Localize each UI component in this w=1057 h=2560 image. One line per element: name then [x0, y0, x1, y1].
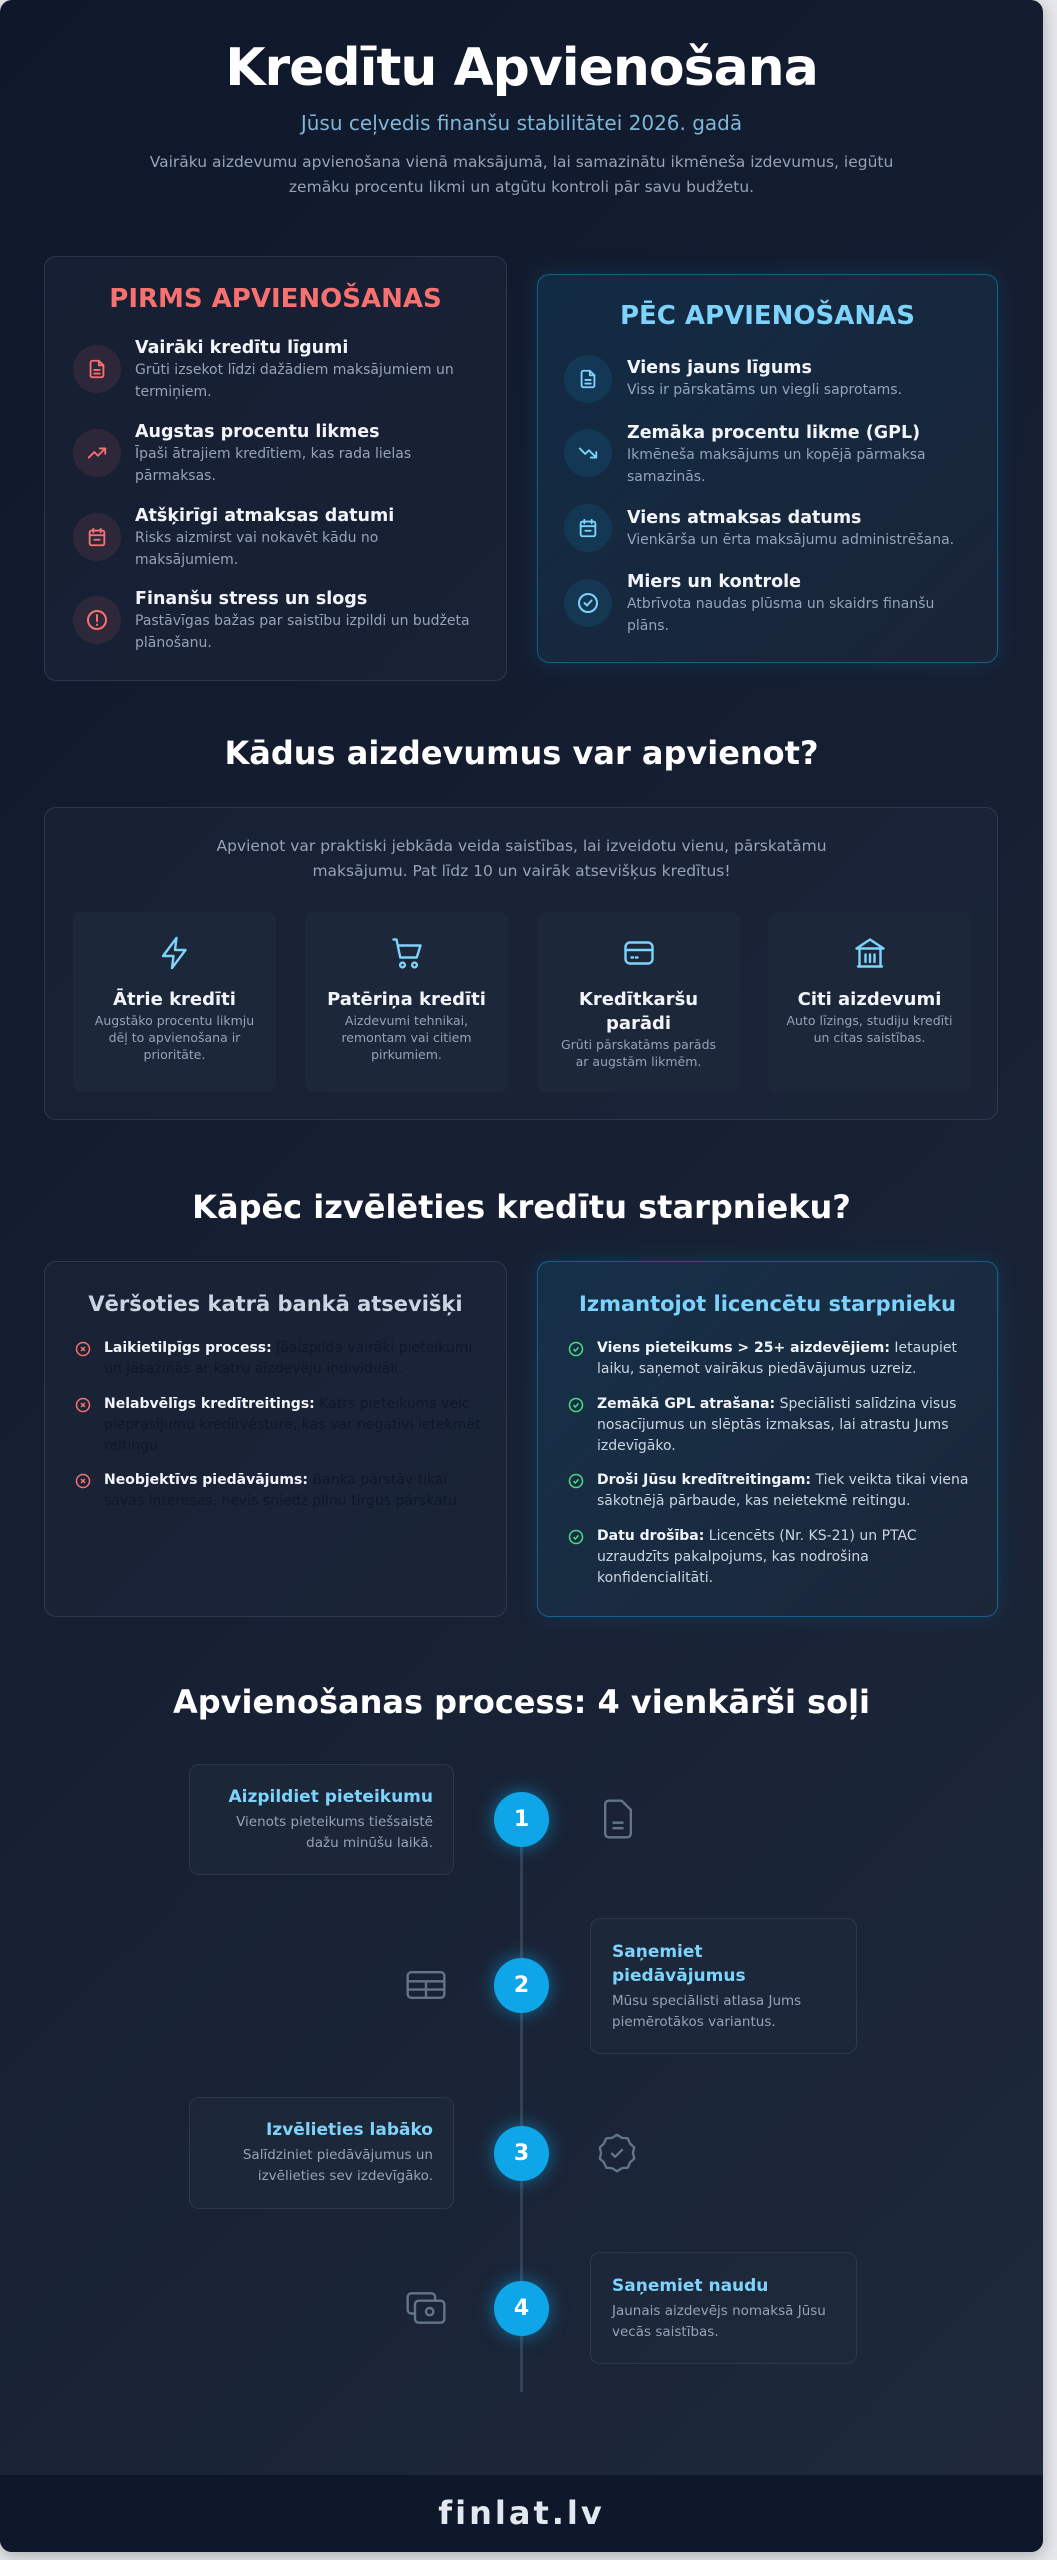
- item: peace: Atbrīvota naudas plūsma un skaidrs finanšu plāns.: [627, 596, 934, 634]
- item: biased offer: Neobjektīvs piedāvājums: Banka pārstāv tikai savas intereses, nevis sniedz pilnu tirgus pārskatu.: [104, 1472, 461, 1509]
- footer: finlat.lv: [438, 2494, 605, 2532]
- icon: trend up: [73, 429, 121, 477]
- step 1 card: dažu minūšu laikā.: [306, 1835, 433, 1851]
- icon: money step4: [406, 2292, 446, 2324]
- icon: calendar red: [73, 513, 121, 561]
- subtitle: Jūsu ceļvedis finanšu stabilitātei 2026. gadā: [301, 111, 742, 135]
- card: other loans: Auto līzings, studiju kredīti: [786, 1013, 952, 1028]
- icon: badge check: [598, 2134, 636, 2172]
- card: credit cards: Grūti pārskatāms parāds: [561, 1037, 716, 1052]
- step 3 card: Izvēlieties labāko: [266, 2120, 433, 2140]
- icon: document red: [73, 345, 121, 393]
- icon: card: [624, 941, 654, 965]
- item: high rates: Augstas procentu likmes: [135, 422, 380, 442]
- item: one date: [627, 508, 954, 548]
- step 4 card: vecās saistības.: [612, 2324, 719, 2340]
- step 1 card: Vienots pieteikums tiešsaistē: [236, 1814, 433, 1830]
- icon: document step1: [604, 1800, 632, 1838]
- item: data security: Datu drošība: Licencēts (Nr. KS-21) un PTAC uzraudzīts pakalpojums, kas nodrošina konfidencialitāti.: [597, 1528, 917, 1586]
- item: peace: [627, 572, 934, 634]
- step 3 card: izvēlieties sev izdevīgāko.: [258, 2168, 433, 2184]
- item: safe rating: Droši Jūsu kredītreitingam: Tiek veikta tikai viena sākotnējā pārbaude, kas neietekmē reitingu.: [597, 1472, 968, 1509]
- item: one contract: Viss ir pārskatāms un viegli saprotams.: [627, 382, 902, 398]
- intro text: Vairāku aizdevumu apvienošana vienā maksājumā, lai samazinātu ikmēneša izdevumus, iegūtu zemāku procentu likmi un atgūtu kontroli pār savu budžetu.: [150, 153, 893, 196]
- item: different dates: [135, 506, 394, 568]
- step 1 number: 1: [514, 1807, 529, 1832]
- panel: before: [44, 256, 507, 681]
- step 1 card: Aizpildiet pieteikumu: [228, 1787, 433, 1807]
- footer: [0, 2475, 1043, 2552]
- step 2 card: Saņemiet: [612, 1942, 703, 1962]
- item: different dates: Atšķirīgi atmaksas datumi: [135, 506, 394, 526]
- card: credit cards: Kredītkaršu: [579, 989, 698, 1010]
- item: multiple contracts: Grūti izsekot līdzi dažādiem maksājumiem un termiņiem.: [135, 362, 454, 400]
- card: fast loans: Augstāko procentu likmju: [95, 1013, 254, 1028]
- step 2 number: 2: [514, 1973, 529, 1998]
- item: lower rate: Ikmēneša maksājums un kopējā pārmaksa samazinās.: [627, 447, 926, 485]
- panel: after: [537, 274, 998, 663]
- card: fast loans: Ātrie kredīti: [113, 989, 236, 1010]
- icon: table step2: [406, 1971, 446, 1999]
- item: one date: Viens atmaksas datums: [627, 508, 861, 528]
- heading: process: Apvienošanas process: 4 vienkārši soļi: [173, 1683, 870, 1721]
- step 4 number: 4: [514, 2296, 529, 2321]
- heading: before: PIRMS APVIENOŠANAS: [109, 284, 442, 314]
- text: loan types intro: Apvienot var praktiski jebkāda veida saistības, lai izveidotu vienu, pārskatāmu maksājumu. Pat līdz 10 un vairāk atsevišķus kredītus!: [216, 837, 827, 880]
- card: other loans: un citas saistības.: [814, 1030, 925, 1045]
- step 2 number: [494, 1958, 549, 2013]
- heading: which loans: Kādus aizdevumus var apvienot?: [224, 734, 819, 772]
- card: other loans: [768, 912, 971, 1092]
- panel: loan types: [44, 807, 998, 1120]
- icon: lightning: [162, 936, 187, 970]
- card: credit cards: parādi: [606, 1013, 671, 1034]
- card: fast loans: [73, 912, 276, 1092]
- item: lowest GPL: Zemākā GPL atrašana: Speciālisti salīdzina visus nosacījumus un slēptās izmaksas, lai atrastu Jums izdevīgāko.: [597, 1396, 956, 1454]
- card: consumer loans: pirkumiem.: [371, 1047, 442, 1062]
- step 1 number: [494, 1792, 549, 1847]
- item: multiple contracts: Vairāki kredītu līgumi: [135, 338, 348, 358]
- icon: calendar blue: [564, 504, 612, 552]
- panel: banks separately: [44, 1261, 507, 1617]
- icon: alert: [73, 596, 121, 644]
- step 2 card: Mūsu speciālisti atlasa Jums: [612, 1993, 801, 2009]
- step 3 number: 3: [514, 2141, 529, 2166]
- item: stress: Pastāvīgas bažas par saistību izpildi un budžeta plānošanu.: [135, 613, 470, 651]
- item: one application: Viens pieteikums > 25+ aizdevējiem: Ietaupiet laiku, saņemot vairākus piedāvājumus uzreiz.: [597, 1340, 957, 1377]
- item: different dates: Risks aizmirst vai nokavēt kādu no maksājumiem.: [135, 530, 378, 568]
- step 4 card: Jaunais aizdevējs nomaksā Jūsu: [612, 2303, 826, 2319]
- icon: cart: [392, 938, 422, 969]
- step 2 card: piedāvājumus: [612, 1966, 746, 1986]
- item: lower rate: Zemāka procentu likme (GPL): [627, 423, 920, 443]
- card: consumer loans: remontam vai citiem: [341, 1030, 472, 1045]
- step 3 card: [189, 2097, 454, 2209]
- item: multiple contracts: [135, 338, 454, 400]
- step 1 card: [189, 1764, 454, 1875]
- heading: after: PĒC APVIENOŠANAS: [620, 301, 915, 331]
- card: consumer loans: Patēriņa kredīti: [327, 989, 486, 1010]
- icon: document blue: [564, 355, 612, 403]
- timeline line: [520, 1820, 523, 2392]
- card: fast loans: dēļ to apvienošana ir: [109, 1030, 240, 1045]
- item: one contract: [627, 358, 902, 398]
- step 2 card: [590, 1918, 857, 2054]
- card: fast loans: prioritāte.: [144, 1047, 205, 1062]
- step 4 number: [494, 2281, 549, 2336]
- item: stress: Finanšu stress un slogs: [135, 589, 367, 609]
- item: peace: Miers un kontrole: [627, 572, 801, 592]
- step 3 number: [494, 2126, 549, 2181]
- heading: Izmantojot licencētu starpnieku: [579, 1292, 956, 1316]
- heading: why broker: Kāpēc izvēlēties kredītu starpnieku?: [192, 1188, 851, 1226]
- item: stress: [135, 589, 470, 651]
- item: lower rate: [627, 423, 926, 485]
- step 4 card: Saņemiet naudu: [612, 2276, 768, 2296]
- heading: Vēršoties katrā bankā atsevišķi: [88, 1292, 463, 1316]
- item: high rates: [135, 422, 411, 484]
- step 3 card: Salīdziniet piedāvājumus un: [243, 2147, 433, 2163]
- panel: licensed broker: [537, 1261, 998, 1617]
- item: high rates: Īpaši ātrajiem kredītiem, kas rada lielas pārmaksas.: [135, 446, 411, 484]
- step 4 card: [590, 2252, 857, 2364]
- icon: bank: [855, 938, 885, 968]
- item: one date: Vienkārša un ērta maksājumu administrēšana.: [627, 532, 954, 548]
- card: other loans: Citi aizdevumi: [798, 989, 941, 1010]
- title: Kredītu Apvienošana: [225, 38, 818, 98]
- card: consumer loans: Aizdevumi tehnikai,: [345, 1013, 468, 1028]
- item: time consuming: Laikietilpīgs process: Jāaizpilda vairāki pieteikumi un jāsazinās ar katru aizdevēju individuāli.: [104, 1340, 472, 1377]
- card: consumer loans: [305, 912, 508, 1092]
- icon: check circle: [564, 579, 612, 627]
- step 2 card: piemērotākos variantus.: [612, 2014, 776, 2030]
- item: bad credit rating: Nelabvēlīgs kredītreitings: Katrs pieteikums veic pieprasījumu kredītvēsturē, kas var negatīvi ietekmēt reitingu.: [104, 1396, 480, 1454]
- item: one contract: Viens jauns līgums: [627, 358, 812, 378]
- card: credit cards: ar augstām likmēm.: [576, 1054, 701, 1069]
- card: credit cards: [537, 912, 740, 1092]
- icon: trend down: [564, 429, 612, 477]
